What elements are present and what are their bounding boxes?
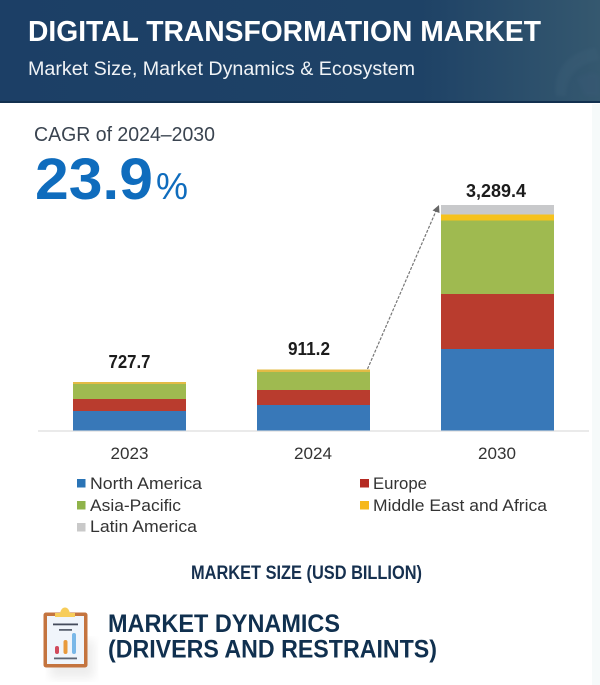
title: DIGITAL TRANSFORMATION MARKET — [28, 16, 541, 48]
section heading: MARKET DYNAMICS — [108, 610, 340, 638]
legend: North America: North America — [90, 474, 203, 493]
stacked bar chart — [38, 181, 589, 463]
icon: clipboard with chart — [44, 608, 94, 678]
bar: 2023 — [73, 352, 186, 463]
bar: 2023: 727.7 — [108, 352, 150, 372]
axis caption: MARKET SIZE (USD BILLION) — [191, 563, 422, 584]
CAGR value: % — [156, 166, 188, 207]
bar: 2030: 3,289.4 — [466, 181, 526, 201]
legend: Middle East and Africa: Middle East and Africa — [373, 496, 548, 515]
bar: 2024: 911.2 — [288, 339, 330, 359]
legend: Latin America: Latin America — [90, 517, 198, 536]
arrow: growth — [368, 205, 440, 369]
bar: 2030: 2030 — [478, 444, 516, 463]
bar: 2030 — [441, 181, 554, 463]
bar: 2024 — [257, 339, 370, 463]
header banner — [0, 0, 600, 103]
bar: 2023: 2023 — [110, 444, 148, 463]
bar: 2024: 2024 — [294, 444, 332, 463]
subtitle: Market Size, Market Dynamics & Ecosystem — [28, 59, 415, 80]
legend — [77, 474, 548, 536]
section heading: (DRIVERS AND RESTRAINTS) — [108, 636, 437, 664]
legend: Europe: Europe — [373, 474, 427, 493]
CAGR value: 23.9 — [35, 147, 153, 212]
section heading — [108, 610, 437, 664]
CAGR label: CAGR of 2024–2030 — [34, 124, 215, 146]
legend: Asia-Pacific: Asia-Pacific — [90, 496, 182, 515]
